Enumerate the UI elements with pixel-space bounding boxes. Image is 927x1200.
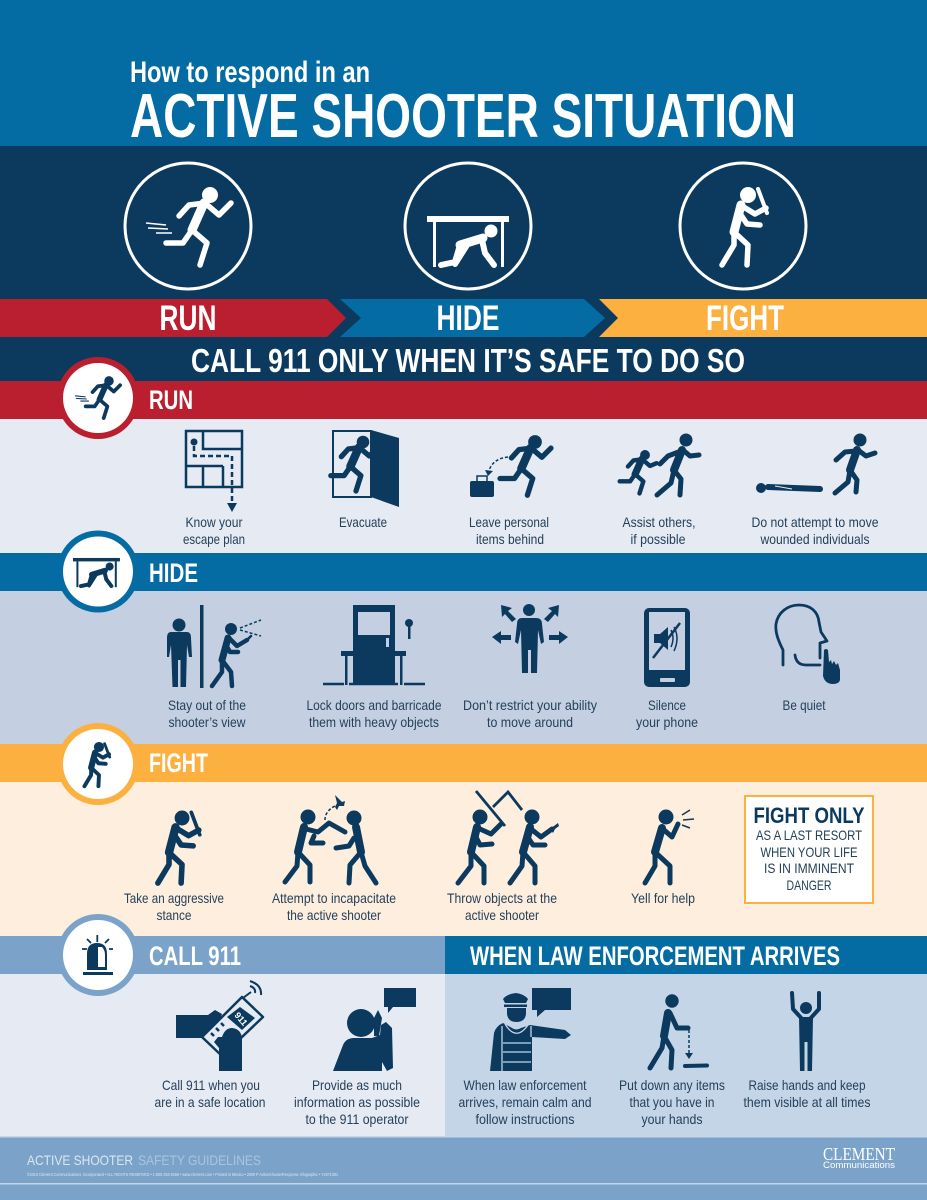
text: know your escape plan: Know your: [186, 514, 243, 530]
icon: room to move: [492, 604, 568, 673]
text: put down items: Put down any items: [619, 1077, 725, 1093]
text: don't restrict: [463, 697, 597, 730]
text: put down items: your hands: [642, 1111, 702, 1127]
icon: run circle: [125, 163, 251, 289]
text: call when safe: are in a safe location: [154, 1094, 266, 1110]
footer title: [27, 1152, 261, 1168]
text: aggressive stance: stance: [156, 907, 192, 923]
text: do not attempt to move: [752, 514, 879, 547]
icon: throw objects: [458, 791, 559, 883]
footer: [0, 1136, 927, 1200]
section: fight: [0, 723, 927, 936]
text: lock doors: Lock doors and barricade: [306, 697, 442, 713]
footer title: SAFETY GUIDELINES: [138, 1152, 261, 1168]
text: raise hands: them visible at all times: [744, 1094, 870, 1110]
icon: put down items: [650, 994, 707, 1068]
icon: yell for help: [645, 810, 694, 883]
text: evacuate: Evacuate: [339, 514, 387, 530]
logo: clement communications: CLEMENT: [823, 1144, 895, 1164]
icon: leave items behind: [470, 435, 551, 497]
icon: police officer: [490, 988, 571, 1071]
heading: run: RUN: [149, 385, 193, 415]
callout: fight only as last resort: IS IN IMMINENT: [764, 860, 854, 876]
text: aggressive stance: [124, 890, 224, 923]
footer small print: ©2018 Clement Communications, Incorporated • ALL RIGHTS RESERVED • 1-800-253-6368 • www.clement.com • Printed in Mexico • 2009 P ActiveShooterResponse Infographic • Y4071081: [27, 1171, 338, 1177]
text: aggressive stance: Take an aggressive: [124, 890, 224, 906]
text: provide information: Provide as much: [312, 1077, 402, 1093]
overview panel: run hide fight: [0, 146, 927, 381]
text: throw objects: Throw objects at the: [447, 890, 557, 906]
text: throw objects: active shooter: [465, 907, 539, 923]
icon: hand holding phone: 911: [232, 1010, 250, 1028]
heading: fight: FIGHT: [149, 748, 208, 778]
callout: fight only as last resort: WHEN YOUR LIFE: [760, 844, 858, 860]
text: silence your phone: your phone: [636, 714, 698, 730]
icon: assist others: [620, 434, 699, 495]
icon: barricade door: [323, 605, 425, 685]
icon: hide badge: [73, 558, 120, 587]
icon: fight badge: [84, 742, 110, 786]
icon: evacuate door: [331, 430, 399, 507]
icon: fight circle: [680, 163, 806, 289]
text: remain calm: [458, 1077, 592, 1127]
text: remain calm: arrives, remain calm and: [458, 1094, 592, 1110]
icon: person on phone with speech bubble: [333, 988, 416, 1071]
text: assist others: if possible: [630, 531, 686, 547]
callout: fight only as last resort: DANGER: [786, 877, 832, 893]
text: attempt to incapacitate: the active shooter: [287, 907, 381, 923]
text: be quiet: Be quiet: [782, 697, 826, 713]
icon: alarm beacon: [82, 935, 113, 975]
text: put down items: that you have in: [630, 1094, 714, 1110]
text: leave personal items: items behind: [476, 531, 544, 547]
icon: hide circle: [405, 163, 531, 289]
text: do not attempt to move: Do not attempt to move: [752, 514, 879, 530]
text: put down items: [619, 1077, 725, 1127]
icon: wounded individual: [756, 434, 875, 493]
heading: call 911: CALL 911: [149, 941, 241, 971]
chevron: run: [0, 299, 346, 338]
text: assist others: Assist others,: [622, 514, 696, 530]
text: throw objects: [447, 890, 557, 923]
icon: aggressive stance: [158, 811, 200, 883]
text: stay out of view: [168, 697, 246, 730]
text: know your escape plan: escape plan: [183, 531, 245, 547]
icon: be quiet: [776, 605, 840, 684]
chevron: run: RUN: [160, 299, 216, 338]
text: raise hands: [744, 1077, 870, 1110]
callout: fight only as last resort: FIGHT ONLY: [754, 803, 865, 828]
text: provide information: [294, 1077, 420, 1127]
icon: raised hands: [792, 993, 819, 1071]
text: provide information: information as possible: [294, 1094, 420, 1110]
icon: hand holding phone: [176, 981, 263, 1071]
text: call when safe: Call 911 when you: [162, 1077, 260, 1093]
text: leave personal items: [469, 514, 549, 547]
text: remain calm: follow instructions: [476, 1111, 574, 1127]
chevron: hide: [340, 299, 605, 338]
heading: hide: HIDE: [149, 558, 198, 588]
text: remain calm: When law enforcement: [464, 1077, 587, 1093]
text: silence your phone: Silence: [648, 697, 686, 713]
text: know your escape plan: [183, 514, 245, 547]
icon: run badge: [75, 376, 120, 418]
text: provide information: to the 911 operator: [306, 1111, 409, 1127]
section: call 911: [0, 914, 445, 1136]
icon: incapacitate shooter: [285, 795, 376, 883]
text: lock doors: [306, 697, 442, 730]
text: silence your phone: [636, 697, 698, 730]
heading: call 911 only when safe: CALL 911 ONLY WHEN IT’S SAFE TO DO SO: [191, 342, 745, 379]
logo: clement communications: [823, 1144, 896, 1170]
text: stay out of view: Stay out of the: [168, 697, 246, 713]
text: call when safe: [154, 1077, 266, 1110]
section: hide: [0, 530, 927, 744]
callout: fight only as last resort: [745, 796, 873, 903]
text: stay out of view: shooter’s view: [168, 714, 246, 730]
footer title: ACTIVE SHOOTER: [27, 1152, 133, 1168]
text: do not attempt to move: wounded individuals: [760, 531, 870, 547]
text: don't restrict: to move around: [487, 714, 573, 730]
icon: out of shooter's view: [167, 605, 261, 688]
section: run: [0, 357, 927, 553]
text: attempt to incapacitate: Attempt to incapacitate: [272, 890, 396, 906]
text: attempt to incapacitate: [272, 890, 396, 923]
chevron: hide: HIDE: [436, 299, 500, 338]
chevron: fight: [599, 299, 927, 338]
text: raise hands: Raise hands and keep: [748, 1077, 866, 1093]
icon: silent phone: [644, 608, 690, 687]
text: don't restrict: Don’t restrict your ability: [463, 697, 597, 713]
text: assist others: [622, 514, 696, 547]
chevron: fight: FIGHT: [706, 299, 784, 338]
icon: escape plan map: [186, 431, 242, 512]
text: yell for help: Yell for help: [631, 890, 695, 906]
title banner: [0, 0, 927, 151]
logo: clement communications: Communications: [823, 1160, 896, 1170]
text: lock doors: them with heavy objects: [309, 714, 439, 730]
title banner: How to respond in an: [130, 56, 370, 89]
section: when law enforcement arrives: [445, 936, 927, 1136]
text: leave personal items: Leave personal: [469, 514, 549, 530]
callout: fight only as last resort: AS A LAST RESORT: [756, 827, 862, 843]
